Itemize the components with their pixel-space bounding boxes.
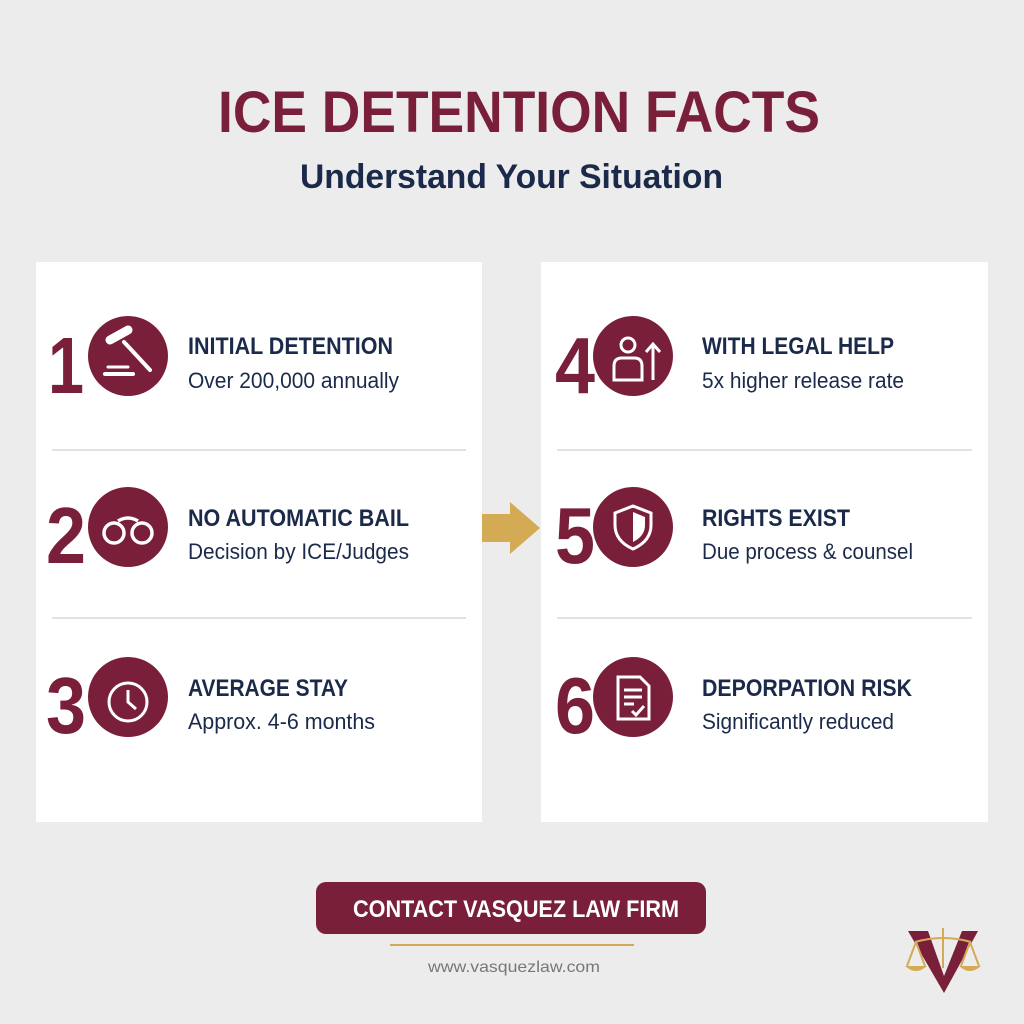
icon: person with arrow [614, 338, 660, 380]
arrow [482, 502, 540, 554]
row 2: 2 [46, 491, 86, 580]
panel: left [36, 262, 482, 822]
button: CONTACT VASQUEZ LAW FIRM [353, 896, 679, 923]
row 2 [46, 487, 409, 580]
row 1: Over 200,000 annually [188, 368, 399, 393]
button [316, 882, 706, 934]
row 4 [555, 316, 904, 410]
url: www.vasquezlaw.com [427, 959, 600, 976]
row 1 [48, 316, 399, 410]
row 3: 3 [46, 661, 86, 750]
row 5: 5 [555, 491, 595, 580]
row 5: RIGHTS EXIST [702, 505, 850, 532]
icon: document [618, 677, 649, 719]
icon: shield [615, 506, 651, 549]
row 4: WITH LEGAL HELP [702, 333, 894, 360]
row 4: 4 [555, 321, 595, 410]
title: ICE DETENTION FACTS [218, 80, 820, 145]
row 5 [555, 487, 913, 580]
row 4: 5x higher release rate [702, 368, 904, 393]
row 2: Decision by ICE/Judges [188, 539, 409, 564]
subtitle: Understand Your Situation [300, 158, 723, 196]
row 3: AVERAGE STAY [188, 675, 348, 702]
row 3: Approx. 4-6 months [188, 709, 375, 734]
row 1: 1 [48, 321, 84, 410]
row 6: DEPORPATION RISK [702, 675, 913, 702]
row 1: INITIAL DETENTION [188, 333, 393, 360]
icon: handcuffs [104, 518, 152, 543]
icon: gavel [105, 330, 150, 374]
icon: clock [109, 683, 147, 721]
row 2: NO AUTOMATIC BAIL [188, 505, 409, 532]
row 5: Due process & counsel [702, 539, 913, 564]
panel: right [541, 262, 988, 822]
row 6: Significantly reduced [702, 709, 894, 734]
row 3 [46, 657, 375, 750]
row 6: 6 [555, 661, 595, 750]
row 6 [555, 657, 913, 750]
logo [905, 928, 981, 993]
